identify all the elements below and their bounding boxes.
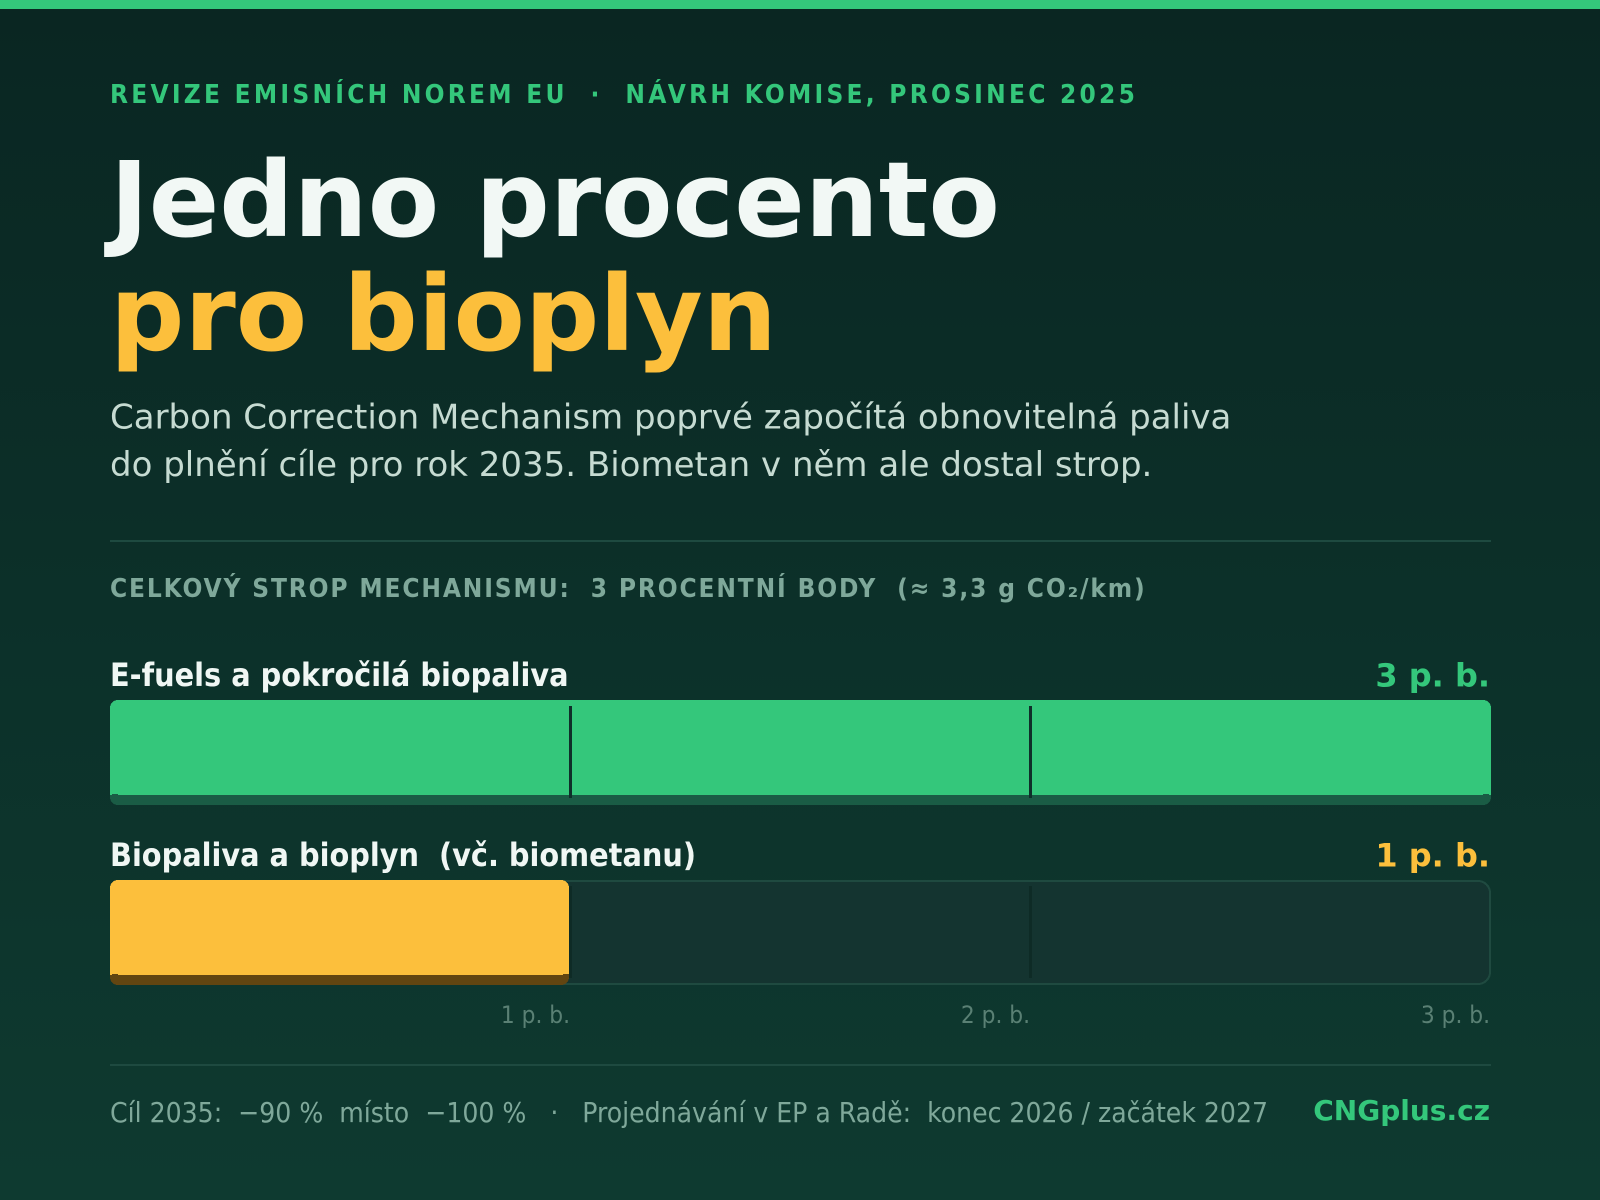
section heading: CELKOVÝ STROP MECHANISMU: 3 PROCENTNÍ BODY (≈ 3,3 g CO₂/km) (110, 572, 1147, 604)
footer note: Cíl 2035: −90 % místo −100 % · Projednávání v EP a Radě: konec 2026 / začátek 2027 (110, 1096, 1268, 1129)
scale labels: 3 p. b. (1421, 1001, 1490, 1029)
top accent band (0, 0, 1600, 9)
label: e-fuels: E-fuels a pokročilá biopaliva (110, 656, 569, 694)
title (104, 139, 1000, 375)
subtitle: Carbon Correction Mechanism poprvé započítá obnovitelná paliva (110, 398, 1231, 438)
row: biopaliva (110, 836, 1490, 985)
subtitle: do plnění cíle pro rok 2035. Biometan v něm ale dostal strop. (110, 445, 1152, 485)
row: e-fuels (110, 656, 1491, 805)
eyebrow: REVIZE EMISNÍCH NOREM EU · NÁVRH KOMISE, PROSINEC 2025 (110, 78, 1138, 110)
scale labels (501, 1001, 1490, 1029)
scale labels: 1 p. b. (501, 1001, 570, 1029)
title: Jedno procento (104, 139, 1000, 261)
bar: 3 p. b. (110, 700, 1491, 805)
brand: CNGplus.cz (1313, 1094, 1490, 1127)
subtitle (110, 398, 1231, 485)
value: 1 p. b.: 1 p. b. (1375, 836, 1490, 874)
bar: 1 p. b. of 3 (110, 880, 1490, 985)
label: biopaliva: Biopaliva a bioplyn (vč. biometanu) (110, 836, 696, 874)
scale labels: 2 p. b. (961, 1001, 1030, 1029)
value: 3 p. b.: 3 p. b. (1375, 656, 1490, 694)
title: pro bioplyn (110, 253, 777, 375)
